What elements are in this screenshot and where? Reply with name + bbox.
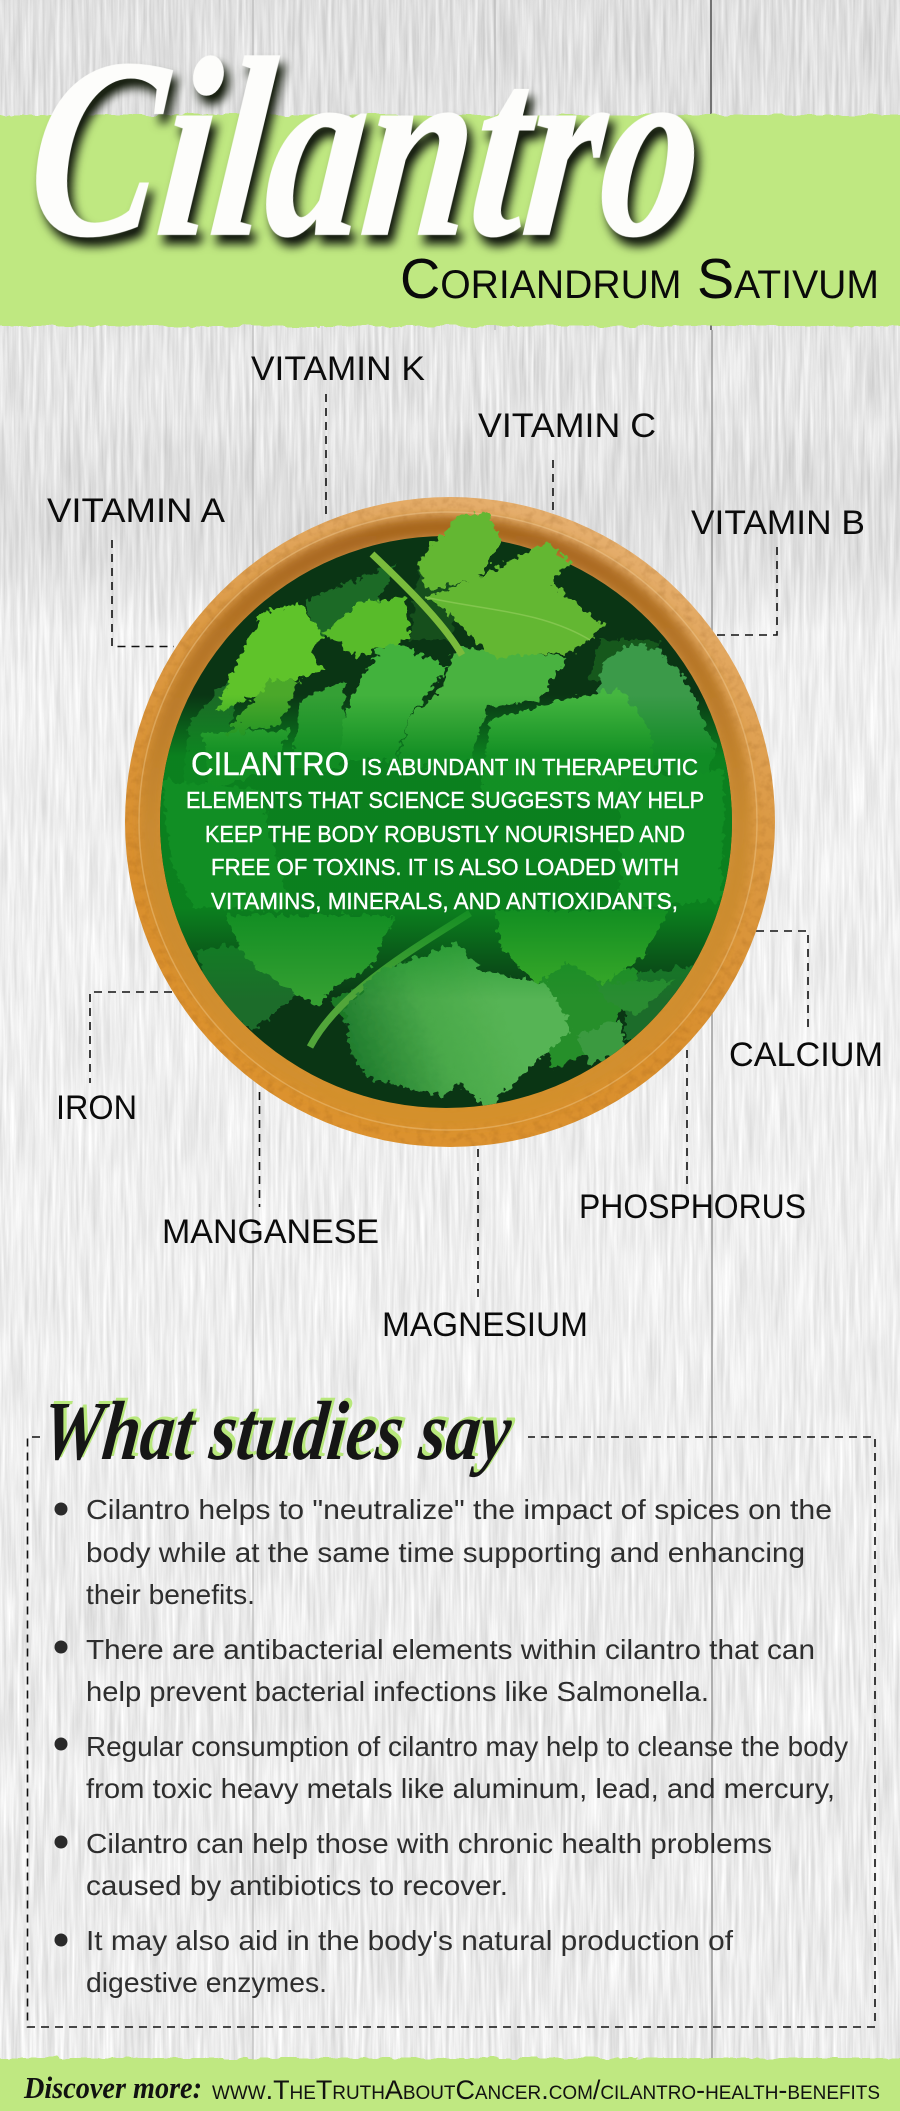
lower dark leaves <box>195 945 695 1070</box>
bowl description text: FREE OF TOXINS. IT IS ALSO LOADED WITH <box>211 854 679 880</box>
bullet 2 <box>54 1634 815 1707</box>
label: Vitamin B <box>691 504 865 635</box>
bullet 3 <box>54 1731 848 1804</box>
label: Vitamin K: VITAMIN K <box>251 350 425 388</box>
label: Calcium: CALCIUM <box>729 1036 883 1074</box>
bowl description text: CILANTRO <box>191 746 349 782</box>
bullet 2: There are antibacterial elements within cilantro that can <box>86 1634 815 1665</box>
green paint banner <box>0 115 900 326</box>
bullet 4: caused by antibiotics to recover. <box>86 1870 508 1901</box>
panel: what studies say <box>28 1382 875 2027</box>
dark right leaf <box>598 643 725 900</box>
lower right leaf <box>495 910 670 984</box>
left and right leaves behind text <box>162 770 725 910</box>
label: Calcium <box>729 931 883 1074</box>
label: Phosphorus: PHOSPHORUS <box>579 1188 806 1226</box>
dark upper leaves <box>186 561 662 754</box>
bowl description text: KEEP THE BODY ROBUSTLY NOURISHED AND <box>205 821 685 847</box>
bowl description text: VITAMINS, MINERALS, AND ANTIOXIDANTS, <box>211 888 678 914</box>
label: Vitamin A: VITAMIN A <box>47 492 225 530</box>
label: Vitamin A <box>47 492 225 646</box>
heading: What studies say: What studies say <box>41 1382 520 1475</box>
top stem <box>372 554 462 655</box>
label: Vitamin B: VITAMIN B <box>691 504 865 542</box>
lower right small leaves <box>575 980 676 1065</box>
bowl description text: IS ABUNDANT IN THERAPEUTIC <box>361 754 698 780</box>
heading: What studies say: What studies say <box>38 1385 516 1478</box>
green text backing <box>150 695 750 1000</box>
bullet 2: help prevent bacterial infections like Salmonella. <box>86 1676 709 1707</box>
lower left leaf <box>225 915 395 1007</box>
bowl description text <box>186 746 704 914</box>
bowl rim <box>125 497 775 1147</box>
wooden bowl with cilantro leaves <box>125 497 775 1147</box>
subtitle: Coriandrum Sativum: Coriandrum Sativum <box>400 247 879 311</box>
top leaf overlapping rim <box>418 512 605 657</box>
lower stem <box>310 913 470 1047</box>
upper left leaf <box>215 603 324 735</box>
label: Magnesium: MAGNESIUM <box>382 1306 588 1344</box>
bullet 3: Regular consumption of cilantro may help to cleanse the body <box>86 1731 848 1762</box>
bullet 5 <box>54 1925 733 1998</box>
bowl contents: leaves <box>150 530 750 1120</box>
center right leaf <box>395 647 660 800</box>
bullet 5: digestive enzymes. <box>86 1967 327 1998</box>
label: Vitamin C: VITAMIN C <box>478 407 656 445</box>
footer band <box>0 2058 900 2111</box>
bullet 3: from toxic heavy metals like aluminum, lead, and mercury, <box>86 1773 835 1804</box>
small bright leaf <box>324 597 410 657</box>
label: Iron <box>56 992 172 1127</box>
label: Manganese: MANGANESE <box>162 1213 379 1251</box>
bullet 1: Cilantro helps to "neutralize" the impact of spices on the <box>86 1494 832 1525</box>
bullet 5: It may also aid in the body's natural production of <box>86 1925 733 1956</box>
center leaf <box>204 638 448 790</box>
footer: discover more: Discover more: <box>23 2070 202 2105</box>
bullet 4: Cilantro can help those with chronic health problems <box>86 1828 772 1859</box>
dashed panel border <box>28 1437 875 2027</box>
bullet 4 <box>54 1828 772 1901</box>
label: Iron: IRON <box>56 1089 137 1127</box>
bottom leaf <box>345 944 573 1107</box>
bullet 1: their benefits. <box>86 1579 255 1610</box>
bowl description text: ELEMENTS THAT SCIENCE SUGGESTS MAY HELP <box>186 787 704 813</box>
footer: url: www.TheTruthAboutCancer.com/cilantro-health-benefits <box>212 2075 880 2105</box>
bullet 1 <box>54 1494 832 1610</box>
bullet 1: body while at the same time supporting and enhancing <box>86 1537 805 1568</box>
